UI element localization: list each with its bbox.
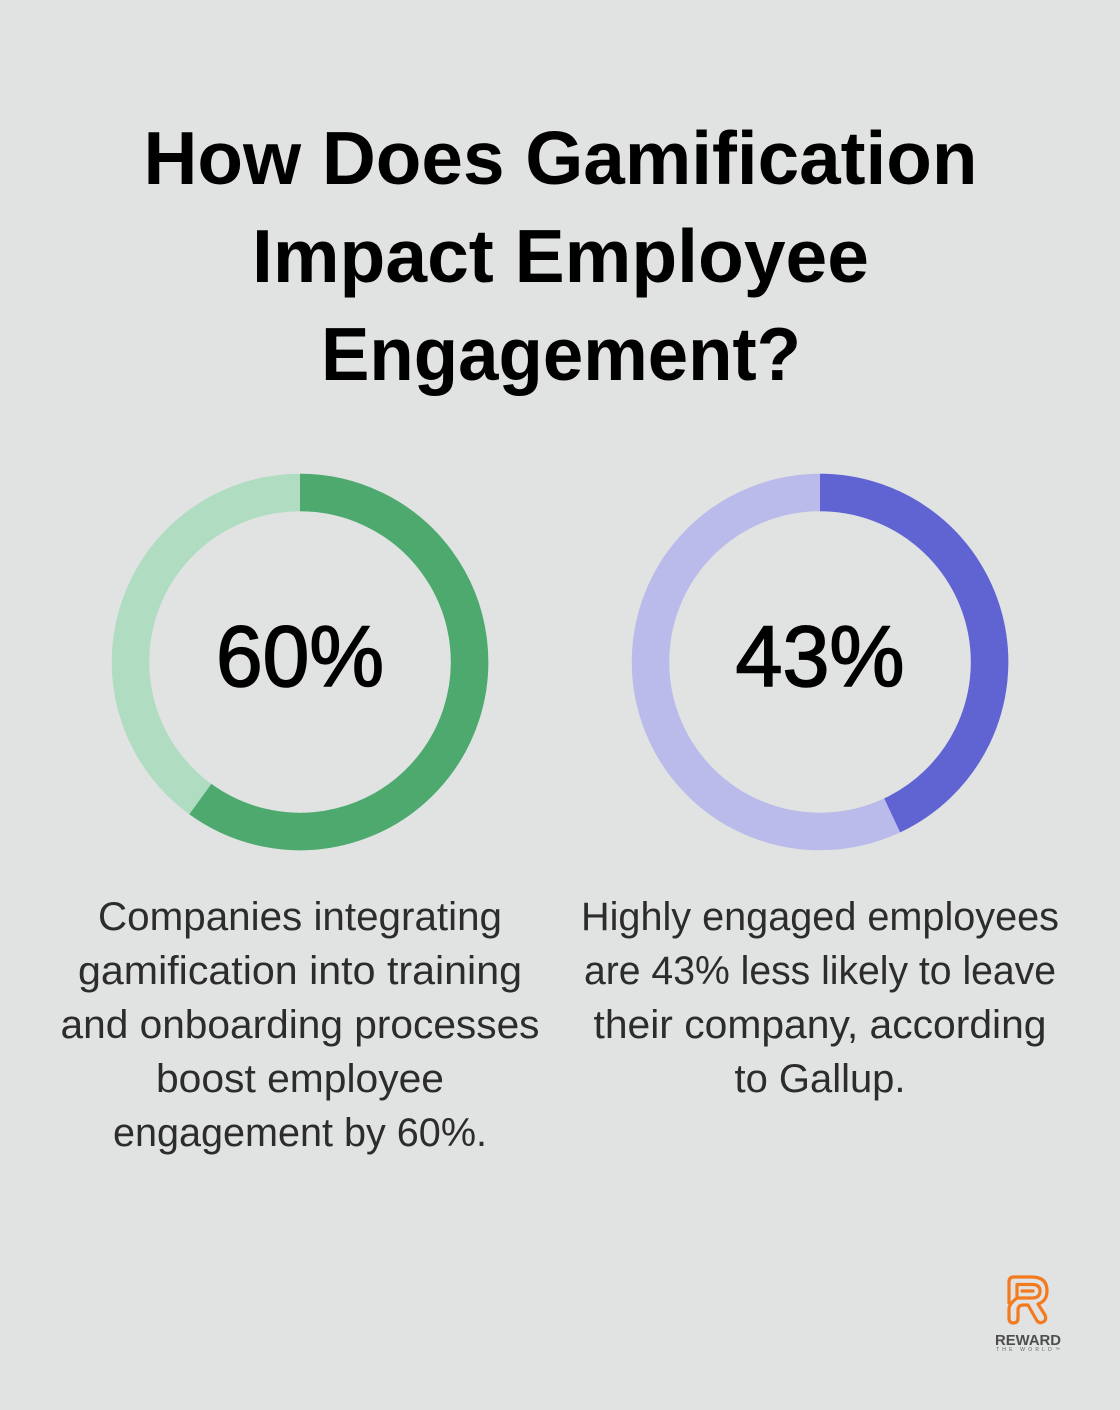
description: 60%: boost employee [156, 1057, 444, 1101]
description: 43%: their company, according [594, 1003, 1046, 1047]
logo tagline: THE WORLD™ [996, 1347, 1060, 1353]
description: 43% [581, 895, 1059, 1101]
donut chart: 60% [130, 492, 470, 832]
title: How Does Gamification [144, 116, 978, 200]
value: 60%: 60% [216, 609, 384, 705]
logo: Reward the World [995, 1277, 1061, 1353]
description: 43%: to Gallup. [734, 1057, 906, 1101]
donut chart: 43% [650, 492, 990, 832]
panel: 60% statistic [60, 492, 540, 1155]
title: Engagement? [321, 312, 801, 396]
title: Impact Employee [252, 214, 869, 298]
panel: 43% statistic [581, 492, 1059, 1101]
description: 43%: are 43% less likely to leave [584, 949, 1056, 993]
description: 60%: engagement by 60%. [113, 1111, 487, 1155]
description: 60%: Companies integrating [98, 895, 502, 939]
description: 60%: gamification into training [78, 949, 522, 993]
icon: R mark [1009, 1277, 1047, 1323]
description: 43%: Highly engaged employees [581, 895, 1059, 939]
title [144, 116, 978, 396]
value: 43%: 43% [736, 609, 904, 705]
description: 60% [60, 895, 540, 1155]
description: 60%: and onboarding processes [60, 1003, 540, 1047]
logo wordmark: REWARD [995, 1333, 1061, 1349]
